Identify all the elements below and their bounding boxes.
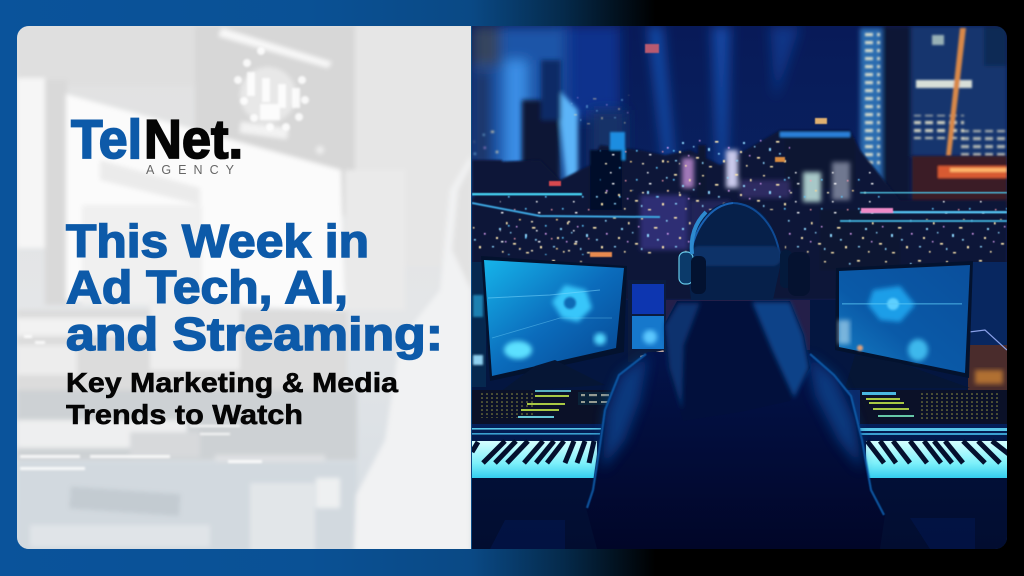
city lights: [473, 95, 1007, 265]
logo wordmark: Net.: [144, 108, 243, 170]
left monitor: [481, 256, 627, 392]
subtitle: Key Marketing & Media: [66, 367, 399, 398]
subtitle: [66, 367, 399, 430]
logo tagline: AGENCY: [146, 163, 235, 177]
hood: [666, 301, 810, 386]
center mini screens: [628, 284, 666, 358]
panel: city night scene: [472, 26, 1010, 549]
lit windows on towers: [474, 28, 1006, 167]
left side panel: [472, 262, 486, 387]
torso: [594, 352, 869, 478]
mid city mass: [472, 130, 1007, 300]
torso edge highlights: [587, 354, 884, 515]
subtitle: Trends to Watch: [66, 399, 303, 430]
sliders and dials: left deck: [472, 390, 612, 424]
sky: [472, 26, 1007, 549]
title: This Week in: [66, 215, 369, 267]
distant towers: left blue glow: [472, 26, 627, 198]
lower desk area: [472, 300, 1007, 390]
right monitor: [835, 261, 973, 388]
title: [66, 215, 443, 360]
piano keys left: [472, 441, 597, 478]
headphone right: [780, 250, 810, 296]
light rays: [561, 26, 802, 165]
head: [687, 202, 781, 300]
foreground towers: [522, 26, 1007, 208]
neon horizon lines: [472, 44, 1007, 257]
stool shapes below keyboard: [490, 518, 975, 549]
title: Ad Tech, AI,: [66, 261, 348, 313]
sliders and dials: right deck: [860, 390, 1007, 424]
red building: [912, 156, 1007, 206]
shoulder shading: [602, 355, 862, 470]
logo: [71, 108, 243, 177]
logo wordmark: Tel: [71, 108, 142, 170]
hood fold shading: [665, 302, 809, 410]
panel: faded studio photo: [17, 26, 475, 553]
right side panel: [968, 262, 1007, 390]
piano strip and area below: [472, 424, 1007, 549]
piano keys right: [866, 441, 1010, 478]
title: and Streaming:: [66, 308, 443, 360]
panel divider: [471, 26, 472, 549]
glowing blocks in the skyline: [640, 150, 850, 250]
headphone left: [679, 212, 706, 294]
person in hoodie: [586, 202, 885, 549]
